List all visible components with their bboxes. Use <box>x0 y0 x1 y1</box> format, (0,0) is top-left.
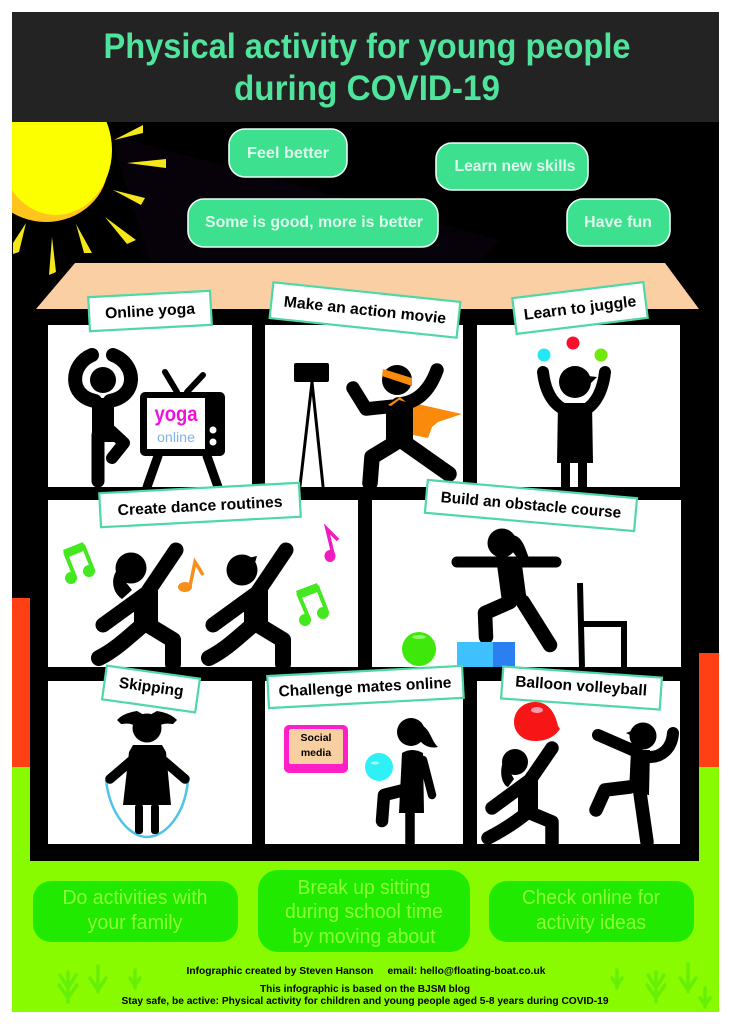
callout: check online <box>489 881 694 942</box>
callout: break up sitting <box>258 870 470 952</box>
pill: have fun: Have fun <box>584 214 652 231</box>
label: challenge mates online <box>267 666 464 708</box>
callout: do activities with your family: your family <box>88 912 182 934</box>
roof <box>36 263 699 309</box>
social media screen: Social <box>301 732 332 744</box>
tv <box>140 372 225 487</box>
panel: juggle <box>477 325 680 487</box>
panel: skipping <box>48 681 252 844</box>
red side wall right <box>699 653 719 773</box>
label: balloon volleyball <box>501 667 662 710</box>
juggler figure <box>543 366 605 487</box>
pill: learn new skills: Learn new skills <box>454 158 576 175</box>
night sky background <box>12 122 719 782</box>
label: create dance routines: Create dance routines <box>117 494 283 519</box>
title <box>104 27 630 108</box>
pill: have fun <box>567 199 670 246</box>
label: skipping <box>102 666 200 712</box>
callout: do activities with your family: Do activities with <box>62 887 208 909</box>
label: learn to juggle <box>512 282 648 334</box>
icon: green music note <box>63 542 95 584</box>
juggling balls <box>538 336 608 362</box>
label: balloon volleyball: Balloon volleyball <box>515 673 648 700</box>
yoga figure <box>75 355 131 481</box>
panel: dance routines <box>48 500 358 667</box>
dancer two <box>209 550 286 664</box>
dancer one <box>99 550 176 664</box>
right player <box>596 722 673 842</box>
tv: online <box>157 429 195 445</box>
footer credits: This infographic is based on the BJSM blog <box>260 983 470 995</box>
icon: green music note <box>296 583 329 626</box>
callout: break up sitting: during school time <box>285 901 443 923</box>
green ground <box>12 767 719 1012</box>
callout: check online: activity ideas <box>536 912 646 934</box>
social media screen <box>284 725 348 773</box>
callout: check online: Check online for <box>522 887 660 909</box>
label: make an action movie: Make an action movie <box>283 294 447 328</box>
footer credits: Infographic created by Steven Hanson email: hello@floating-boat.co.uk <box>186 965 546 977</box>
panel: obstacle course <box>372 500 681 668</box>
label: learn to juggle: Learn to juggle <box>523 293 638 324</box>
label: build an obstacle course <box>425 480 637 531</box>
icon: sun <box>12 122 166 275</box>
panel: balloon volleyball <box>477 681 680 844</box>
footer credits: Stay safe, be active: Physical activity for children and young people aged 5-8 years during COVID-19 <box>122 995 609 1007</box>
footer credits <box>122 965 609 1007</box>
blocks <box>457 642 515 667</box>
red side wall left <box>12 598 30 770</box>
panel: online yoga <box>48 325 252 487</box>
challenge figure <box>382 718 438 843</box>
label: create dance routines <box>99 483 301 527</box>
social media screen: media <box>301 747 331 759</box>
title: Physical activity for young people <box>104 27 630 66</box>
tv: yoga <box>154 403 198 426</box>
pill: learn new skills <box>436 143 588 190</box>
label: build an obstacle course: Build an obstacle course <box>440 489 622 522</box>
action figure <box>353 365 462 483</box>
label: online yoga: Online yoga <box>105 301 196 322</box>
grass tufts left <box>59 966 140 1002</box>
pill: some is good, more is better <box>188 199 438 247</box>
pill: feel better: Feel better <box>247 145 329 162</box>
green ball <box>402 632 436 666</box>
obstacle figure <box>457 528 556 645</box>
house frame <box>30 309 699 861</box>
icon: orange music note <box>178 562 203 592</box>
title: during COVID-19 <box>234 69 500 108</box>
label: skipping: Skipping <box>118 675 185 700</box>
header band <box>12 12 719 122</box>
left player <box>488 748 552 843</box>
label: online yoga <box>88 291 212 331</box>
camera on tripod <box>294 363 329 486</box>
grass tufts right <box>612 964 710 1007</box>
skipping girl <box>110 711 185 834</box>
faint sun beam <box>110 135 500 262</box>
icon: magenta music note <box>324 529 338 562</box>
cyan ball <box>365 753 393 781</box>
panel: action movie <box>265 325 463 487</box>
callout: do activities with your family <box>33 881 238 942</box>
panel: challenge mates <box>265 681 463 844</box>
balloon <box>514 702 560 741</box>
callout: break up sitting: by moving about <box>292 926 436 948</box>
callout: break up sitting: Break up sitting <box>298 877 430 899</box>
pill: some is good, more is better: Some is good, more is better <box>205 214 423 231</box>
pill: feel better <box>229 129 347 177</box>
label: make an action movie <box>270 282 460 338</box>
label: challenge mates online: Challenge mates online <box>278 674 452 701</box>
chair <box>580 583 627 668</box>
skipping rope <box>106 780 188 837</box>
